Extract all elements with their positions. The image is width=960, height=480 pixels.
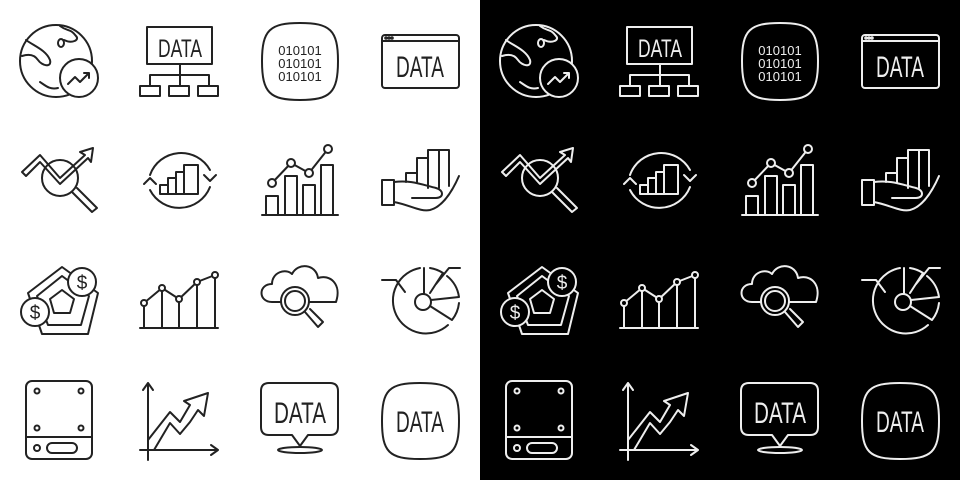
icon: dollar pentagon: $	[77, 273, 88, 294]
icon: growth arrow chart dark	[620, 383, 698, 460]
icon: cycle bar chart	[144, 153, 216, 208]
icon: search trend dark	[502, 148, 577, 212]
icon: growth arrow chart	[140, 383, 218, 460]
icon: data squircle	[382, 383, 459, 459]
icon: binary code: 010101	[278, 56, 322, 71]
icon: binary code: 010101	[278, 43, 322, 58]
icon: binary code	[262, 23, 338, 100]
icon: bar chart with line	[262, 145, 338, 215]
icon: browser data dark: DATA	[876, 51, 924, 84]
icon: binary code dark: 010101	[758, 43, 802, 58]
icon: browser data dark	[862, 35, 939, 88]
icon: cloud search	[262, 266, 338, 327]
icon: globe with trend	[20, 25, 98, 97]
icon: hand with bars	[382, 150, 459, 210]
icon: data network dark: DATA	[638, 35, 682, 63]
icon: dollar pentagon dark	[501, 267, 578, 334]
icon: binary code dark	[742, 23, 818, 100]
icon: cloud search dark	[742, 266, 818, 327]
icon: dollar pentagon dark: $	[510, 303, 521, 324]
icon: pie chart dark	[862, 268, 940, 333]
icon: browser data: DATA	[396, 51, 444, 84]
icon: data network	[140, 27, 218, 96]
icon: data squircle: DATA	[396, 406, 444, 439]
icon: binary code dark: 010101	[758, 69, 802, 84]
icon: data squircle dark	[862, 383, 939, 459]
panel: light icon set	[20, 23, 460, 460]
icon: search trend	[22, 148, 97, 212]
icon: hard drive	[26, 381, 92, 459]
icon: binary code dark: 010101	[758, 56, 802, 71]
icon: data pin dark	[741, 383, 818, 453]
icon: data squircle dark: DATA	[876, 406, 924, 439]
icon: data pin	[261, 383, 338, 453]
icon: line chart dark	[620, 272, 698, 328]
icon: browser data	[382, 35, 459, 88]
icon: globe with trend dark	[500, 25, 578, 97]
icon: data network dark	[620, 27, 698, 96]
icon: hard drive dark	[506, 381, 572, 459]
icon: dollar pentagon: $	[30, 303, 41, 324]
icon: line chart	[140, 272, 218, 328]
icon: dollar pentagon dark: $	[557, 273, 568, 294]
icon: data pin: DATA	[274, 397, 326, 430]
icon: dollar pentagon	[21, 267, 98, 334]
icon: cycle bar chart dark	[624, 153, 696, 208]
icon: data pin dark: DATA	[754, 397, 806, 430]
icon: bar chart with line dark	[742, 145, 818, 215]
icon: pie chart	[382, 268, 460, 333]
panel: dark icon set	[500, 23, 940, 460]
icon: hand with bars dark	[862, 150, 939, 210]
icon: binary code: 010101	[278, 69, 322, 84]
icon: data network: DATA	[158, 35, 202, 63]
